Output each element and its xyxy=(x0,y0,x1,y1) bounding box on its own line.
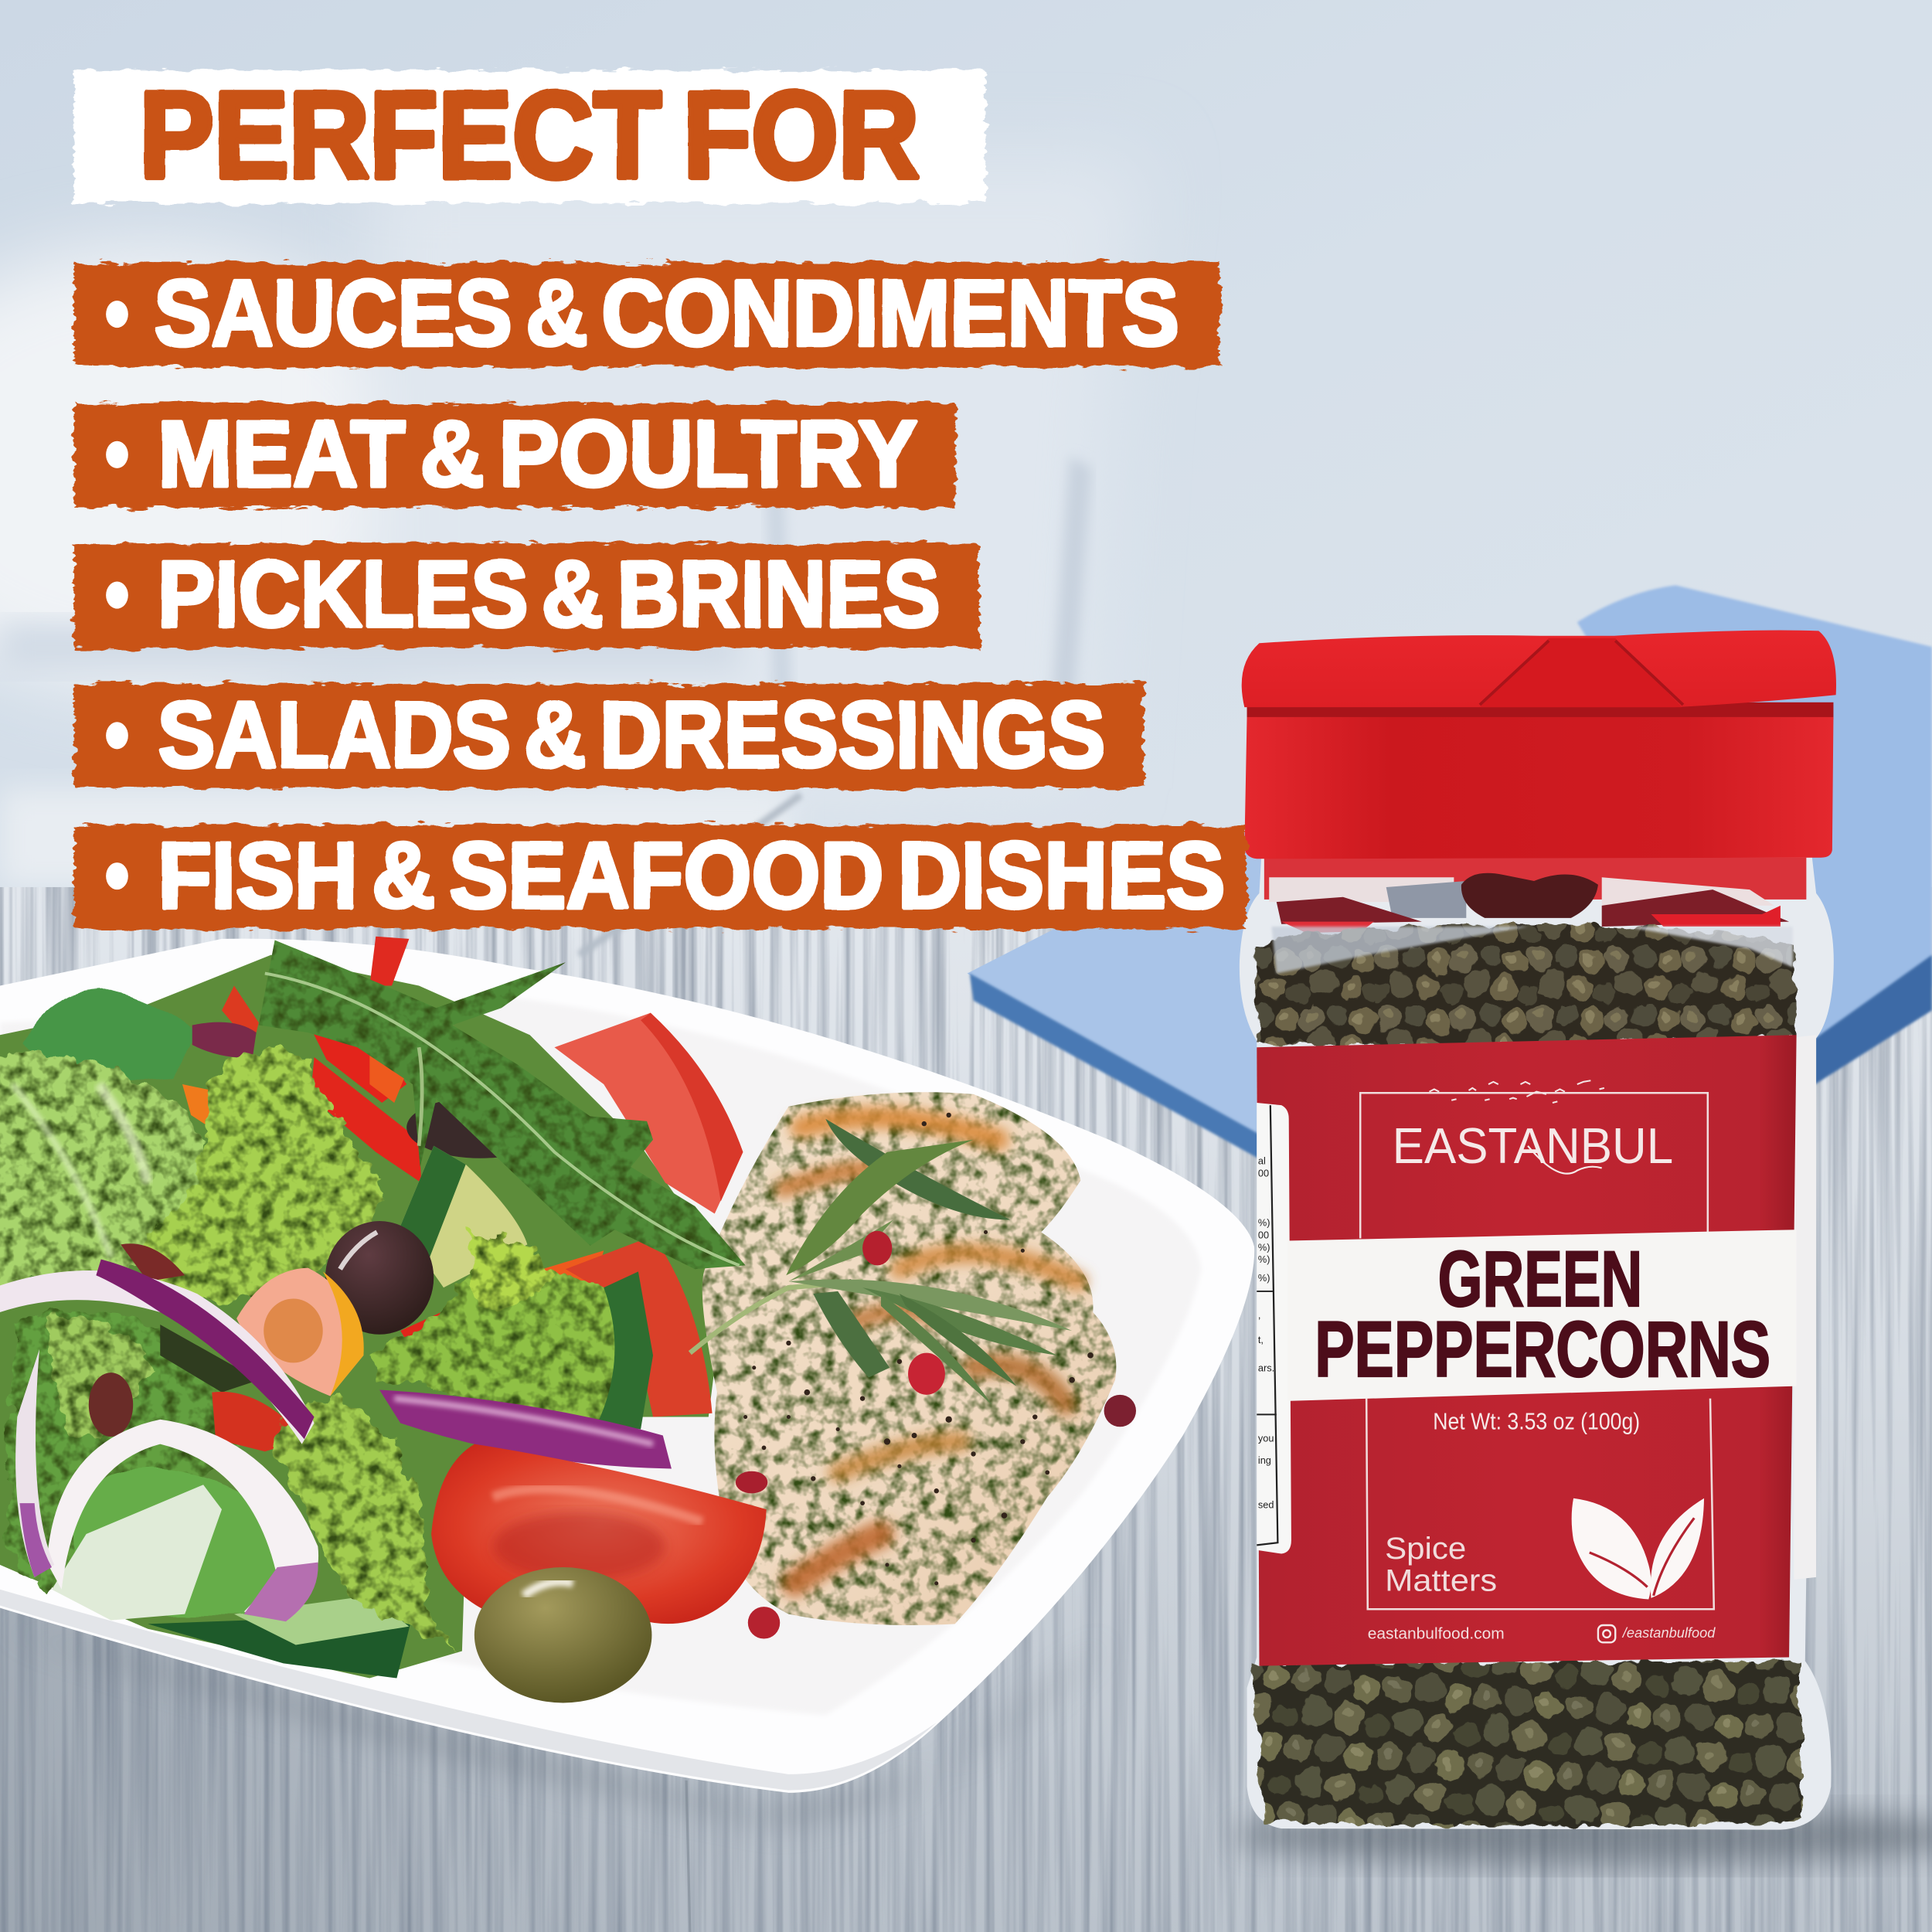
plate lip shade xyxy=(0,1590,937,1791)
nutrition panel: , xyxy=(1258,1309,1260,1321)
fork handle xyxy=(579,794,801,955)
tagline xyxy=(1385,1532,1497,1597)
tomato wedge upper xyxy=(554,1013,743,1213)
logo birds xyxy=(1429,1080,1604,1103)
rosemary sprig xyxy=(690,1119,1072,1405)
tagline: Spice xyxy=(1385,1532,1466,1566)
social handle: /eastanbulfood xyxy=(1621,1624,1716,1641)
lid top xyxy=(1242,631,1836,707)
label frame xyxy=(1360,1093,1714,1609)
pink peppercorns xyxy=(736,1231,1136,1639)
tomato wedge large xyxy=(431,1444,767,1624)
white band xyxy=(1287,1230,1797,1401)
website: eastanbulfood.com xyxy=(1368,1626,1505,1643)
dark lettuce lower-left xyxy=(6,1311,240,1590)
cucumber right xyxy=(597,1271,653,1429)
plate xyxy=(0,939,1254,1793)
cucumber slice bottom xyxy=(148,1596,413,1679)
grilled chicken breast xyxy=(702,1092,1116,1625)
dark olive behind xyxy=(406,1097,554,1158)
lid hinge xyxy=(1480,638,1682,707)
nutrition panel: t, xyxy=(1258,1334,1264,1345)
peppercorns lower xyxy=(1252,1661,1801,1826)
product name xyxy=(1315,1235,1770,1393)
nutrition panel: sed xyxy=(1258,1499,1274,1511)
jar xyxy=(1240,631,1836,1830)
icon: leaves xyxy=(1572,1498,1704,1600)
logo wordmark: EASTANBUL xyxy=(1393,1117,1673,1174)
lid shadow gap xyxy=(1247,702,1833,719)
icon: instagram xyxy=(1598,1625,1615,1642)
list banner: sauces: SAUCES & CONDIMENTS xyxy=(154,260,1179,366)
product name: GREEN xyxy=(1438,1235,1642,1323)
nutrition panel: ing xyxy=(1258,1454,1271,1466)
white lettuce xyxy=(52,1485,222,1621)
salad base xyxy=(0,955,727,1679)
dark gap lower-left xyxy=(160,1325,259,1393)
list banner: salads: SALADS & DRESSINGS xyxy=(158,682,1105,787)
lettuce frilly lower xyxy=(277,1398,462,1651)
right white panel xyxy=(1794,1035,1816,1580)
background: blurred kitchen wall xyxy=(0,0,1932,986)
peppercorns upper xyxy=(1257,924,1797,1046)
heading banner xyxy=(74,66,986,204)
grill marks xyxy=(782,1117,1078,1583)
jar shadow xyxy=(1232,1806,1932,1866)
dried tomato xyxy=(121,1243,185,1281)
cherry tomato xyxy=(236,1268,363,1396)
list banner: fish: FISH & SEAFOOD DISHES xyxy=(158,822,1225,927)
nutrition panel: %) xyxy=(1258,1241,1270,1253)
dark olive xyxy=(325,1221,434,1335)
product name: PEPPERCORNS xyxy=(1315,1305,1770,1393)
nutrition panel: al xyxy=(1258,1155,1266,1167)
nutrition panel: ars. xyxy=(1258,1362,1274,1374)
mid tomato xyxy=(566,1236,713,1417)
nutrition panel: %) xyxy=(1258,1272,1270,1284)
lettuce middle xyxy=(369,1232,634,1423)
plate well xyxy=(0,998,1202,1715)
tomato piece xyxy=(212,1392,305,1451)
lid band xyxy=(1244,717,1833,859)
jar body xyxy=(1240,850,1834,1830)
nutrition panel xyxy=(1257,1103,1291,1554)
background: wooden table xyxy=(0,887,1932,1932)
list banner: pickles: PICKLES & BRINES xyxy=(158,542,940,647)
nutrition panel: you xyxy=(1258,1432,1274,1444)
dark red pepper shadow xyxy=(1277,873,1789,933)
dark back leaf xyxy=(22,988,197,1084)
frilly lettuce upper xyxy=(146,1049,382,1301)
red onion middle xyxy=(379,1389,672,1469)
salad xyxy=(0,937,743,1679)
purple radicchio xyxy=(192,1022,257,1057)
nutrition panel: %) xyxy=(1258,1253,1270,1265)
inner green leaf xyxy=(71,1469,279,1614)
pepper specks xyxy=(743,1113,1094,1585)
list banner: meat: MEAT & POULTRY xyxy=(158,401,918,506)
nutrition panel: 00 xyxy=(1258,1168,1269,1179)
nutrition panel: 00 xyxy=(1258,1229,1269,1240)
title: PERFECT FOR xyxy=(139,66,919,204)
reflective top glass xyxy=(1264,858,1806,918)
grey glass reflection xyxy=(1271,927,1528,974)
background: blurred glass bowl xyxy=(0,160,1140,887)
dried tomato lower xyxy=(89,1372,133,1437)
red label xyxy=(1257,1035,1797,1666)
green olive xyxy=(474,1567,651,1702)
onion ring bottom xyxy=(47,1420,318,1621)
net weight: Net Wt: 3.53 oz (100g) xyxy=(1433,1409,1640,1434)
arugula leaf xyxy=(259,940,746,1269)
pale lettuce left xyxy=(0,1054,204,1287)
cucumber upper xyxy=(400,1146,527,1287)
nutrition panel: %) xyxy=(1258,1216,1270,1228)
onion thin left xyxy=(15,1349,54,1577)
plate shadow xyxy=(0,1627,1109,1824)
tagline: Matters xyxy=(1385,1563,1497,1597)
red pepper strips xyxy=(182,937,604,1362)
onion ring left xyxy=(0,1270,315,1444)
blue napkin xyxy=(968,585,1932,1165)
